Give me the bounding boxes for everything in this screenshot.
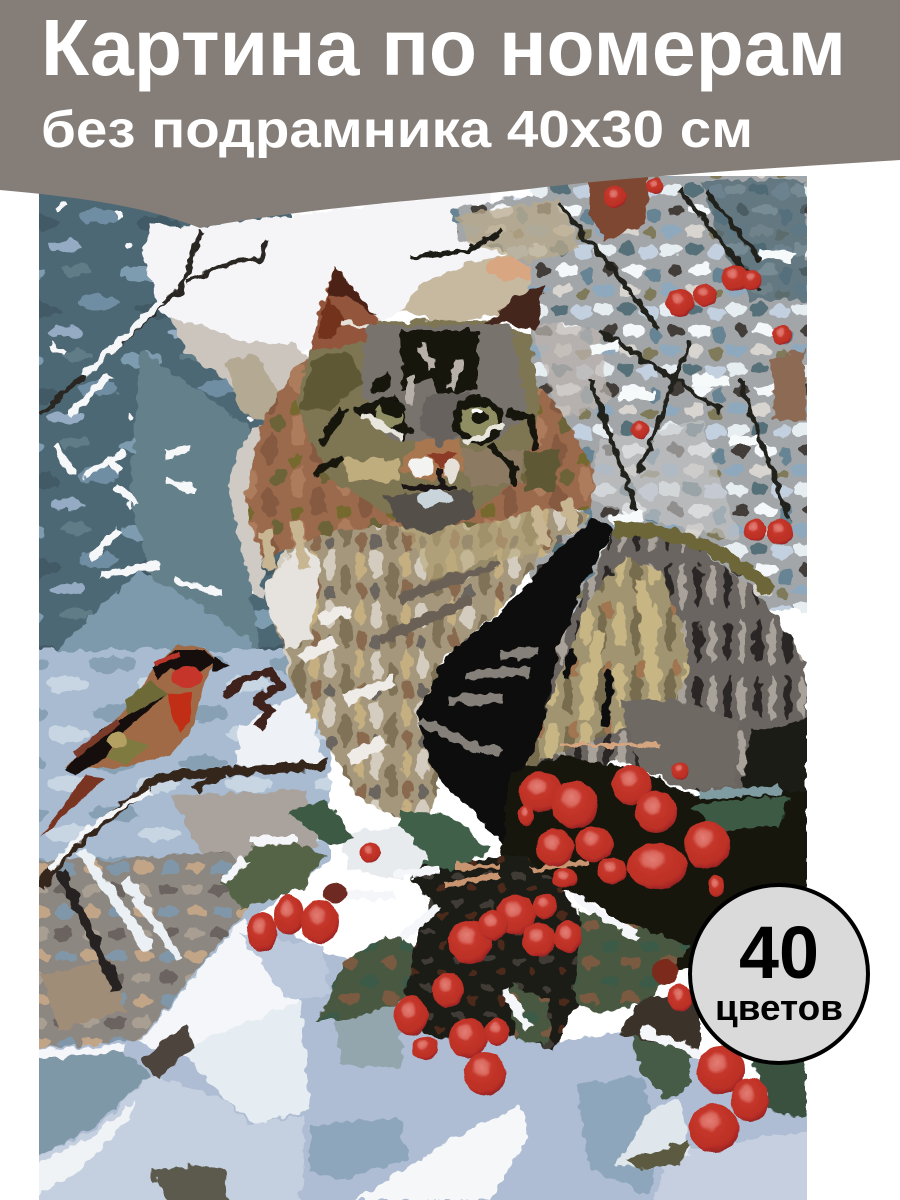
snow ground [30,915,820,1200]
left snowy conifers [39,194,292,653]
chin [414,490,454,506]
left ear [312,266,378,350]
cat back and tail [525,528,807,800]
title: Картина по номерам [41,3,846,92]
white sky [142,190,500,352]
snow on twig stubs near cat [225,672,280,728]
badge: 40 colours: цветов [715,987,843,1028]
painting: cat and bullfinch with rowan berries [30,170,820,1200]
dark leaf mass behind berries [222,755,807,1168]
white muzzle [410,457,434,477]
branch under bird [39,765,326,888]
right eye [452,396,505,444]
dark cheek stripes [315,410,538,485]
rowan berries [247,178,793,1152]
upper right snowy tree [450,170,820,610]
muzzle and nose bridge [400,440,465,482]
right ear [480,283,545,330]
lower left blue and brown forest [30,650,330,1050]
header banner [0,0,900,228]
mouth [402,470,457,488]
subtitle: без подрамника 40х30 см [41,101,753,159]
badge: 40 colours: 40 [739,911,819,994]
left eye [353,393,412,440]
cat chest fluff [265,500,590,830]
pale distant trees behind the cat [400,254,531,322]
cat black fur with grey streaks [417,517,613,850]
badge: 40 colours [690,885,868,1063]
cat head [297,266,560,535]
cat ruff [242,358,596,560]
bullfinch [40,645,230,838]
branch with twigs, top left [39,230,266,416]
nose [425,453,457,470]
forehead [360,325,525,440]
